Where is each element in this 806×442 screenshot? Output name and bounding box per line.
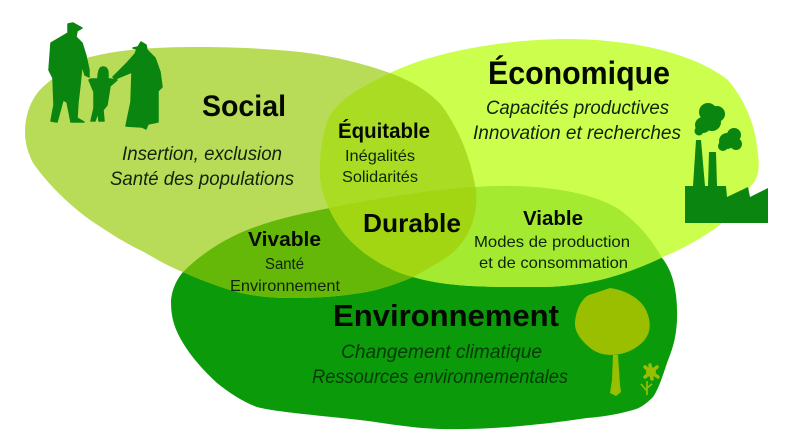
text: social topics: Santé des populations xyxy=(110,169,294,190)
text: équitable topics: Inégalités xyxy=(345,148,415,165)
heading: Social: Social xyxy=(202,90,286,123)
text: environnement topics xyxy=(312,342,568,388)
text: équitable topics xyxy=(342,148,418,186)
icon: flower xyxy=(641,365,658,395)
icon: factory xyxy=(685,103,768,223)
text: viable topics xyxy=(474,234,630,272)
heading: Environnement: Environnement xyxy=(333,298,559,333)
icon: tree xyxy=(575,288,650,396)
blob: social xyxy=(25,47,476,298)
text: équitable topics: Solidarités xyxy=(342,169,418,186)
blob: économique xyxy=(320,39,759,287)
father xyxy=(49,23,89,122)
overlap: viable xyxy=(329,186,662,287)
text: vivable topics: Environnement xyxy=(230,278,341,295)
text: économique topics xyxy=(473,98,681,144)
text: viable topics: et de consommation xyxy=(479,255,628,272)
text: environnement topics: Ressources environnementales xyxy=(312,367,568,388)
text: vivable topics xyxy=(230,256,341,295)
heading: Équitable: Équitable xyxy=(338,120,430,143)
text: économique topics: Innovation et recherches xyxy=(473,123,681,144)
heading: Viable: Viable xyxy=(523,208,583,230)
text: viable topics: Modes de production xyxy=(474,234,630,251)
overlap: équitable xyxy=(320,73,476,208)
text: social topics xyxy=(110,144,294,190)
smoke clouds xyxy=(699,103,717,121)
heading: Durable: Durable xyxy=(363,208,461,238)
heading: Vivable: Vivable xyxy=(248,229,321,251)
text: social topics: Insertion, exclusion xyxy=(122,144,282,165)
icon: family silhouette xyxy=(49,23,162,129)
blob: environnement xyxy=(171,186,677,429)
text: environnement topics: Changement climatique xyxy=(341,342,542,363)
overlap: durable xyxy=(329,187,476,277)
mother xyxy=(113,42,162,129)
child xyxy=(89,67,117,121)
overlap: vivable xyxy=(183,187,472,298)
text: économique topics: Capacités productives xyxy=(486,98,669,119)
text: vivable topics: Santé xyxy=(265,256,304,273)
heading: Économique: Économique xyxy=(488,55,670,91)
